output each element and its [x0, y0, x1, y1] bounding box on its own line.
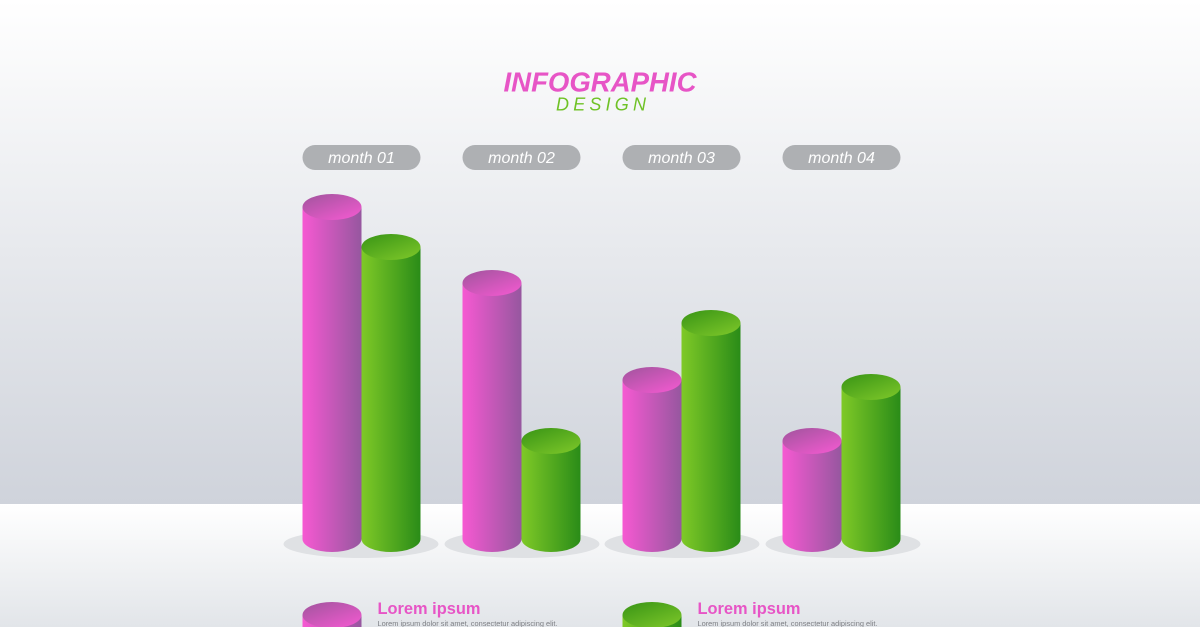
legend icon: pink cylinder: [302, 602, 362, 627]
month 02 bars: [444, 270, 600, 558]
floor shadow: [444, 530, 600, 558]
legend heading: Lorem ipsum: [378, 599, 480, 618]
bar: month 03 pink: [622, 367, 682, 552]
label: month 01: month 01: [328, 150, 395, 167]
month 04 bars: [766, 374, 920, 558]
label: month 02: month 02: [488, 150, 555, 167]
bar: month 02 green: [522, 428, 580, 552]
month 01 bars: [284, 194, 438, 558]
bar: month 04 pink: [782, 428, 842, 552]
bar: month 04 green: [842, 374, 900, 552]
bar: month 03 green: [682, 310, 740, 552]
floor shadow: [284, 530, 438, 558]
bar: month 02 pink: [462, 270, 522, 552]
month 03 bars: [604, 310, 760, 558]
label: month 04: month 04: [808, 150, 875, 167]
bar: month 01 pink: [302, 194, 362, 552]
legend icon: green cylinder: [622, 602, 682, 627]
subheading: design: DESIGN: [556, 94, 650, 114]
legend heading: Lorem ipsum: [698, 599, 800, 618]
cylinder bar chart: [284, 194, 920, 558]
legend: pink series: [302, 599, 558, 627]
floor shadow: [766, 530, 920, 558]
label: month 04: [782, 145, 900, 170]
label: month 03: month 03: [648, 150, 715, 167]
label: month 01: [302, 145, 420, 170]
label: month 02: [462, 145, 580, 170]
label: month 03: [622, 145, 740, 170]
legend: green series: [622, 599, 878, 627]
heading: infographic: INFOGRAPHIC: [504, 66, 697, 98]
background floor: [0, 504, 1200, 627]
title: [504, 66, 697, 114]
month labels: [302, 145, 900, 170]
bar: month 01 green: [362, 234, 420, 552]
floor shadow: [604, 530, 760, 558]
